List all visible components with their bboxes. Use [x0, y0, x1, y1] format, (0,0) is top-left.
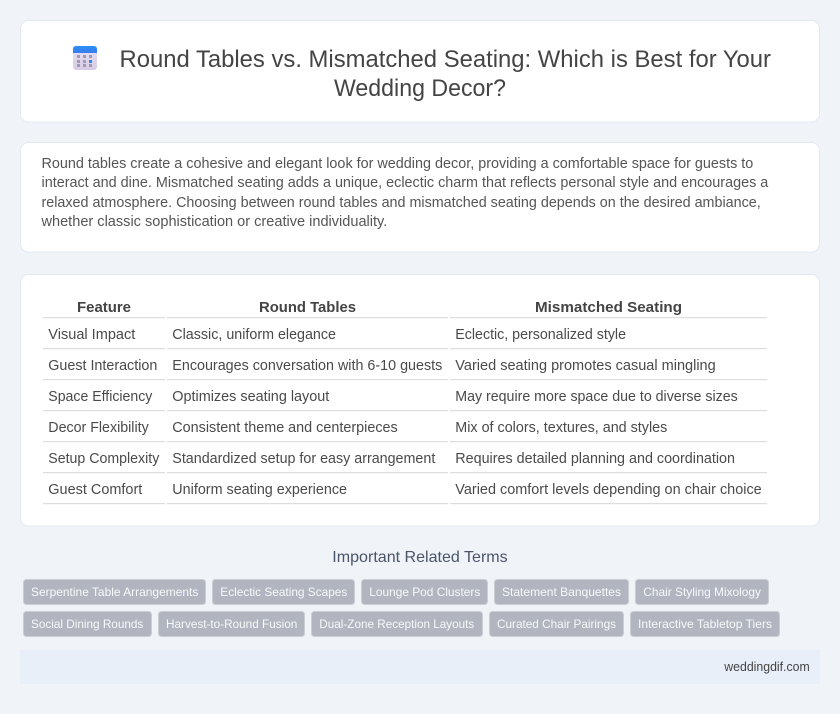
- row: guest interaction: Guest Interaction: [48, 358, 157, 374]
- row: setup complexity: Standardized setup for easy arrangement: [172, 451, 435, 467]
- tag: lounge pod clusters: [362, 580, 488, 604]
- title: [120, 46, 771, 102]
- panel: comparison table: [20, 274, 820, 526]
- footer: [20, 650, 820, 684]
- heading: important related terms: Important Related Terms: [332, 549, 508, 566]
- tag: serpentine table arrangements: Serpentine Table Arrangements: [31, 585, 198, 599]
- tag: curated chair pairings: [490, 612, 624, 636]
- row: space efficiency: Optimizes seating layout: [172, 389, 329, 405]
- title: Round Tables vs. Mismatched Seating: Which is Best for Your: [120, 46, 771, 73]
- row: guest comfort: Guest Comfort: [48, 482, 142, 498]
- row: guest interaction: Varied seating promotes casual mingling: [455, 358, 716, 374]
- icon: calendar: [73, 46, 97, 70]
- row: space efficiency: Space Efficiency: [48, 389, 153, 405]
- tag: social dining rounds: Social Dining Rounds: [31, 617, 143, 631]
- row: visual impact: Eclectic, personalized style: [455, 327, 626, 343]
- row: guest interaction: [48, 358, 716, 374]
- tag: lounge pod clusters: Lounge Pod Clusters: [369, 585, 480, 599]
- tag: harvest-to-round fusion: Harvest-to-Round Fusion: [166, 617, 297, 631]
- title: Wedding Decor?: [334, 75, 506, 102]
- text block: introduction paragraph: [40, 156, 768, 230]
- row: decor flexibility: [48, 420, 667, 436]
- row: space efficiency: [48, 389, 738, 405]
- table header: Mismatched Seating: [535, 299, 682, 316]
- tag: dual-zone reception layouts: [312, 612, 482, 636]
- tag: harvest-to-round fusion: [158, 612, 304, 636]
- text block: introduction paragraph: interact and dine. Mismatched seating adds a unique, eclectic charm that reflects personal style and encourages a: [42, 175, 768, 191]
- row: guest comfort: Uniform seating experience: [172, 482, 347, 498]
- tag: eclectic seating scapes: Eclectic Seating Scapes: [220, 585, 347, 599]
- row: setup complexity: [48, 451, 735, 467]
- tag: interactive tabletop tiers: Interactive Tabletop Tiers: [638, 617, 772, 631]
- tag: statement banquettes: Statement Banquettes: [502, 585, 621, 599]
- row: visual impact: Classic, uniform elegance: [172, 327, 336, 343]
- row: setup complexity: Requires detailed planning and coordination: [455, 451, 735, 467]
- row: guest comfort: Varied comfort levels depending on chair choice: [455, 482, 762, 498]
- tag: social dining rounds: [24, 612, 152, 636]
- tag: eclectic seating scapes: [212, 580, 354, 604]
- tag: curated chair pairings: Curated Chair Pairings: [497, 617, 616, 631]
- tag: chair styling mixology: [636, 580, 768, 604]
- row: decor flexibility: Mix of colors, textures, and styles: [455, 420, 667, 436]
- text block: introduction paragraph: relaxed atmosphere. Choosing between round tables and mismatched seating depends on the desired ambiance,: [42, 195, 761, 211]
- panel: introduction: [20, 142, 820, 252]
- panel: header: [20, 20, 820, 122]
- row: decor flexibility: Decor Flexibility: [48, 420, 149, 436]
- row: decor flexibility: Consistent theme and centerpieces: [172, 420, 398, 436]
- table header: Feature: [77, 299, 131, 316]
- tag: dual-zone reception layouts: Dual-Zone Reception Layouts: [319, 617, 474, 631]
- table header: Round Tables: [259, 299, 356, 316]
- tag: statement banquettes: [494, 580, 628, 604]
- row: setup complexity: Setup Complexity: [48, 451, 160, 467]
- row: guest interaction: Encourages conversation with 6-10 guests: [172, 358, 442, 374]
- tag: serpentine table arrangements: [24, 580, 206, 604]
- row: visual impact: Visual Impact: [48, 327, 135, 343]
- row: space efficiency: May require more space due to diverse sizes: [455, 389, 738, 405]
- tag: chair styling mixology: Chair Styling Mixology: [643, 585, 761, 599]
- tag: interactive tabletop tiers: [630, 612, 780, 636]
- table header: [77, 299, 682, 316]
- text block: introduction paragraph: whether classic sophistication or creative individuality.: [40, 214, 387, 230]
- related term tags: [24, 580, 780, 636]
- row: guest comfort: [48, 482, 762, 498]
- footer: weddingdif.com: [723, 659, 810, 674]
- text block: introduction paragraph: Round tables create a cohesive and elegant look for wedding decor, providing a comfortable space for guests to: [42, 156, 753, 172]
- row: visual impact: [48, 327, 626, 343]
